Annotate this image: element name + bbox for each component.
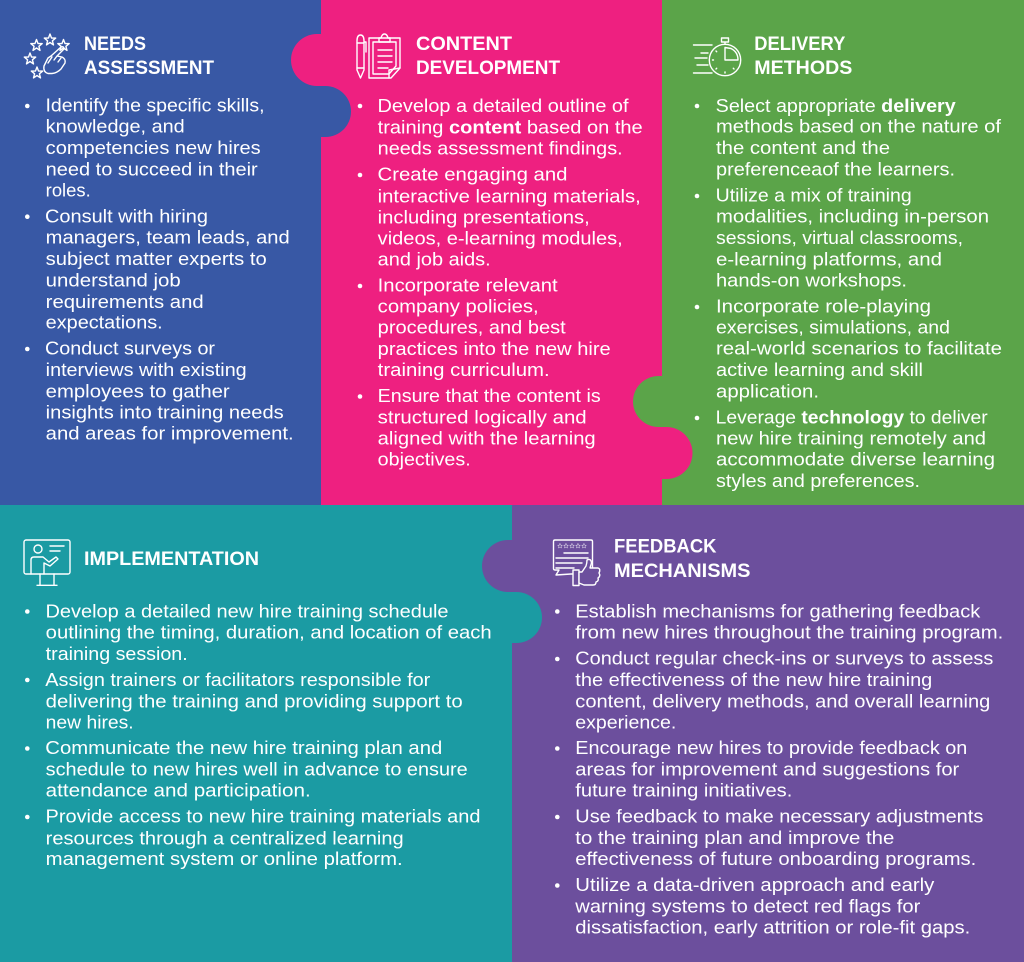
panel: needs assessment [0, 0, 321, 505]
bullet: leverage technology: Leverage technology to deliver [716, 407, 988, 427]
bullet: training modalities: hands-on workshops. [716, 271, 907, 291]
bullet: training schedule: training session. [46, 644, 188, 664]
text block: implementation bullets [25, 601, 492, 869]
bullet: company policies: Incorporate relevant [378, 275, 558, 295]
bullet: role-playing: application. [716, 381, 819, 401]
bullet: select methods [695, 96, 1002, 180]
puzzle tab: blue into pink [321, 86, 351, 137]
bullet: company policies: company policies, [378, 297, 539, 317]
bullet: identify skills: competencies new hires [46, 138, 261, 158]
heading: needs assessment: NEEDS [84, 33, 146, 55]
bullet: detailed outline: training content based on the [378, 117, 643, 137]
bullet: conduct surveys: insights into training needs [46, 403, 284, 423]
heading: feedback mechanisms [614, 536, 750, 582]
bullet: assign trainers [25, 670, 463, 732]
bullet: structured content: objectives. [378, 450, 471, 470]
bullet: select methods: Select appropriate delivery [716, 96, 956, 116]
heading: implementation: IMPLEMENTATION [84, 548, 259, 570]
bullet: learning materials: and job aids. [378, 250, 491, 270]
puzzle tab: pink into blue [291, 34, 322, 86]
bullet: conduct surveys: interviews with existing [46, 360, 247, 380]
bullet: role-playing [695, 297, 1002, 401]
bullet: structured content: structured logically and [378, 407, 587, 427]
heading: delivery methods: METHODS [754, 57, 852, 79]
heading: needs assessment: ASSESSMENT [84, 57, 214, 79]
bullet: leverage technology: accommodate diverse learning [716, 450, 995, 470]
bullet: communicate plan: schedule to new hires well in advance to ensure [46, 759, 468, 779]
puzzle tab: purple into teal [482, 540, 513, 592]
bullet: provide access: management system or online platform. [46, 849, 403, 869]
bullet: provide access: Provide access to new hire training materials and [46, 807, 480, 827]
bullet: training modalities: modalities, including in-person [716, 207, 989, 227]
bullet: communicate plan: attendance and participation. [46, 781, 311, 801]
bullet: role-playing: real-world scenarios to facilitate [716, 339, 1002, 359]
bullet: establish mechanisms: from new hires throughout the training program. [575, 623, 1003, 643]
text block: feedback bullets [555, 601, 1003, 938]
bullet: use feedback: effectiveness of future onboarding programs. [575, 849, 976, 869]
bullet: communicate plan [25, 738, 468, 801]
bullet: company policies: practices into the new hire [378, 339, 611, 359]
bullet: conduct surveys: Conduct surveys or [45, 339, 215, 359]
bullet: learning materials: including presentations, [378, 207, 590, 227]
bullet: consult managers: requirements and [46, 292, 204, 312]
bullet: leverage technology: new hire training remotely and [716, 429, 986, 449]
bullet: conduct surveys: employees to gather [46, 381, 230, 401]
bullet: structured content: Ensure that the content is [378, 386, 601, 406]
bullet: use feedback: to the training plan and improve the [575, 828, 894, 848]
bullet: establish mechanisms: Establish mechanisms for gathering feedback [575, 601, 981, 621]
bullet: provide access: resources through a centralized learning [46, 828, 404, 848]
bullet: regular check-ins: content, delivery methods, and overall learning [575, 691, 990, 711]
bullet: structured content: aligned with the learning [378, 429, 596, 449]
puzzle tab: green into pink [633, 376, 663, 427]
bullet: training schedule: outlining the timing, duration, and location of each [46, 623, 492, 643]
heading: delivery methods [754, 33, 852, 79]
bullet: identify skills: Identify the specific skills, [46, 96, 264, 116]
bullet: consult managers: Consult with hiring [45, 206, 208, 226]
bullet: consult managers: subject matter experts to [46, 249, 267, 269]
bullet: identify skills: knowledge, and [46, 117, 185, 137]
bullet: data-driven approach [555, 875, 970, 938]
bullet: identify skills: need to succeed in their [46, 160, 258, 180]
bullet: consult managers: understand job [46, 271, 181, 291]
bullet: consult managers [25, 206, 290, 333]
bullet: encourage feedback: Encourage new hires to provide feedback on [575, 738, 967, 758]
bullet: detailed outline [358, 96, 643, 159]
icon: stopwatch [694, 38, 741, 76]
bullet: assign trainers: delivering the training and providing support to [46, 692, 463, 712]
heading: feedback mechanisms: FEEDBACK [614, 536, 716, 558]
bullet: data-driven approach: warning systems to detect red flags for [574, 896, 920, 916]
bullet: role-playing: active learning and skill [716, 360, 923, 380]
bullet: structured content [358, 386, 601, 470]
bullet: learning materials [358, 165, 641, 270]
bullet: training modalities: Utilize a mix of training [716, 186, 912, 206]
icon: hand and stars [24, 34, 69, 78]
bullet: role-playing: exercises, simulations, and [716, 317, 950, 337]
panel: feedback mechanisms [482, 505, 1024, 962]
bullet: regular check-ins [555, 649, 993, 732]
bullet: encourage feedback: areas for improvement and suggestions for [575, 759, 959, 779]
puzzle tab: pink into green [662, 427, 693, 479]
puzzle tab: teal into purple [512, 592, 542, 643]
bullet: training schedule: Develop a detailed new hire training schedule [46, 601, 448, 621]
icon: presenter on screen [24, 540, 70, 585]
bullet: consult managers: expectations. [46, 313, 163, 333]
bullet: training modalities [695, 186, 989, 291]
bullet: company policies: procedures, and best [378, 318, 566, 338]
heading: feedback mechanisms: MECHANISMS [614, 560, 750, 582]
bullet: select methods: methods based on the nature of [716, 117, 1002, 137]
text block: content development bullets [358, 96, 643, 470]
bullet: select methods: the content and the [716, 138, 890, 158]
bullet: encourage feedback [555, 738, 967, 801]
bullet: establish mechanisms [555, 601, 1003, 643]
bullet: assign trainers: Assign trainers or facilitators responsible for [45, 670, 430, 690]
bullet: conduct surveys [25, 339, 294, 443]
bullet: identify skills [25, 96, 264, 201]
bullet: provide access [25, 807, 480, 869]
bullet: leverage technology: styles and preferences. [716, 471, 920, 491]
text block: delivery methods bullets [695, 96, 1002, 491]
heading: delivery methods: DELIVERY [754, 33, 845, 55]
bullet: regular check-ins: experience. [575, 712, 676, 732]
heading: content development: DEVELOPMENT [416, 57, 560, 79]
bullet: training modalities: sessions, virtual classrooms, [716, 228, 963, 248]
bullet: training modalities: e-learning platforms, and [716, 249, 942, 269]
bullet: regular check-ins: the effectiveness of the new hire training [575, 670, 932, 690]
bullet: learning materials: interactive learning materials, [378, 186, 641, 206]
bullet: conduct surveys: and areas for improvement. [46, 423, 294, 443]
icon: pen and clipboard [357, 34, 400, 78]
bullet: use feedback: Use feedback to make necessary adjustments [575, 807, 983, 827]
bullet: training schedule [25, 601, 492, 664]
heading: content development [416, 33, 560, 79]
panel: implementation [0, 505, 512, 962]
bullet: company policies: training curriculum. [378, 360, 550, 380]
bullet: leverage technology [695, 407, 995, 491]
panel: content development [291, 0, 662, 505]
heading: needs assessment [84, 33, 214, 79]
panel: delivery methods [633, 0, 1024, 505]
bullet: data-driven approach: Utilize a data-driven approach and early [575, 875, 934, 895]
bullet: company policies [358, 275, 611, 380]
bullet: use feedback [555, 807, 983, 869]
bullet: consult managers: managers, team leads, and [46, 228, 290, 248]
bullet: role-playing: Incorporate role-playing [716, 297, 931, 317]
heading: content development: CONTENT [416, 33, 512, 55]
bullet: learning materials: videos, e-learning modules, [378, 229, 623, 249]
bullet: regular check-ins: Conduct regular check-ins or surveys to assess [575, 649, 993, 669]
bullet: learning materials: Create engaging and [378, 165, 568, 185]
icon: rating bubble and thumbs up [554, 540, 600, 586]
bullet: select methods: preferenceaof the learners. [716, 160, 955, 180]
bullet: detailed outline: needs assessment findings. [378, 139, 623, 159]
bullet: assign trainers: new hires. [46, 712, 134, 732]
bullet: data-driven approach: dissatisfaction, early attrition or role-fit gaps. [575, 918, 970, 938]
bullet: detailed outline: Develop a detailed outline of [378, 96, 630, 116]
bullet: encourage feedback: future training initiatives. [575, 781, 792, 801]
bullet: communicate plan: Communicate the new hire training plan and [45, 738, 442, 758]
bullet: identify skills: roles. [46, 181, 91, 201]
text block: needs assessment bullets [25, 96, 294, 443]
